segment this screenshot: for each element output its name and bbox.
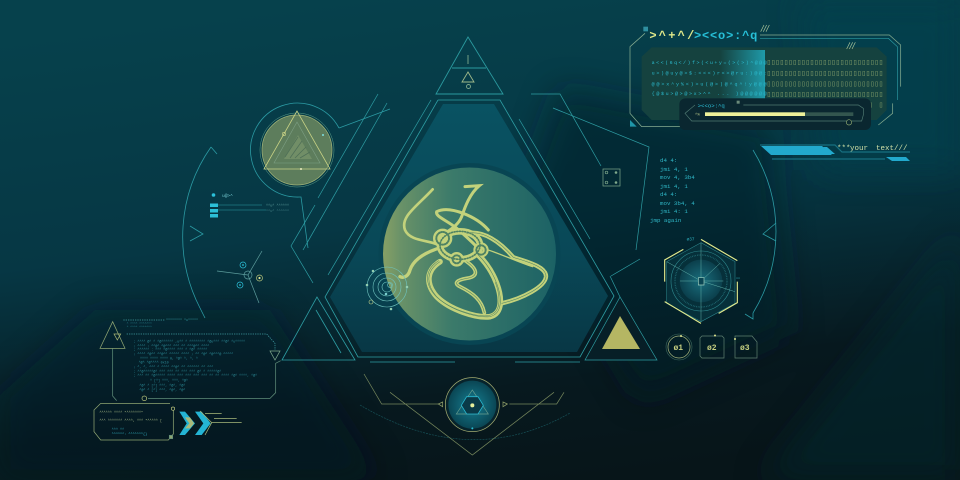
code panel: ^^^^^^^^ ^u^^^^^ [166,318,198,322]
code panel [94,318,281,440]
code panel: ; ^^^^ ^@^^ ^^@^^ ^^^^^ ^^^^ ; ^^ ^@^ ^@^^^@ ^^^^^ [133,352,233,356]
triangle medallion [251,103,390,248]
legend bars: ^^u^ ^^^^^^ [266,204,289,208]
badge 02: ø2 [707,344,717,353]
your text label: *** [837,145,851,153]
legend bars: u@>^ [222,193,233,199]
hexagon gauge [665,238,740,323]
right code text: jmi 4: 1 [660,208,688,215]
code panel: ^@^ ^ [^] ^^^, ^@^, ^@^ [139,383,185,387]
code panel: ^@^ ^@^^^^ 0x10 [139,361,169,365]
code panel: ; ^^^^ : ^^@^ ^@^^^ ^^^ ^^ ^^^@^^ ^^^^ [133,344,209,348]
your text label [760,145,910,161]
badge 02 [700,334,724,358]
code panel: ^ ^^^^ ^^^^^^^ [127,321,152,325]
code panel: ^^^ ^^ [112,428,124,433]
bottom emblem [364,374,564,455]
badge 01 [666,334,692,360]
data decoding panel: ▯▯▯▯▯▯▯▯▯▯▯▯▯▯▯▯▯▯▯▯▯▯▯▯▯▯▯ [767,81,883,89]
right triangle marker [585,259,657,360]
hexagon gauge: ø37 [687,238,695,243]
data decoding panel: ▯▯▯▯▯▯▯▯▯▯▯▯▯▯▯▯▯▯▯▯▯▯▯▯▯▯▯ [767,70,883,78]
your text label: text/// [876,145,908,153]
data decoding panel [630,25,901,130]
hexagon gauge: ^^ [736,277,740,281]
code panel: ; ^^@^^^^^@^ ^^^ ^^^ ^^ ^^^ ^^^ @^ ^ ^^^^^@^ [133,369,221,373]
radar dial on orb [366,267,408,310]
right code text [650,157,695,224]
code panel: ^^^ ^^^^^^^ ^^^^, ^^^ "^^^^^ [ [99,419,162,424]
code panel: ^^^^ ^^^^ ^^^^ 0, ^@^ ^, ^, ^ [140,356,198,360]
central triangle panel [325,100,614,362]
bottom arc [360,405,570,440]
code panel: ^ [^] ^^^, ^^^, ^@^ [150,379,188,383]
node cluster icon [217,251,262,303]
right code text: d4 4: [660,157,677,164]
right code text: mov 4, 3b4 [660,174,695,181]
orb [378,163,560,345]
code panel: ; ^, ^, ^^^ ^ ^^^^ ^^@^ ^^ ^^^^^^ ^^ ^^^ [133,365,213,369]
badge 03 [734,336,757,358]
code panel: ^@^ ^ [^] ^^^, ^@^, ^@^ [139,388,185,392]
right code text: d4 4: [660,191,677,198]
code panel: ^ ^^^^ ^^^^^^^ [127,325,152,329]
code panel: ; ^^^^^^ : ^^^ ^@^^^^ ^^^ ^ ^@^ ^^^^^ [133,348,207,352]
right lines and square icon [531,94,649,250]
badge 03: ø3 [740,344,750,353]
data decoding panel: ><<o>:^q [694,29,757,43]
code panel: ; ^^^ ^^ ^@^^^^^ ^^^^ ^^^ ^^^ ^^^ ^^^ ^^ ^^ ^^^^ ^@^ ^^^^, ^@^ [133,374,257,378]
progress panel: ><<o>:^q [698,103,725,110]
data decoding panel: u>)@uy@>$:<<<)r<>@ru:)@@: [652,71,767,77]
right code text: jmi 4, 1 [660,183,688,190]
left large arc [183,147,217,318]
creature [400,186,546,317]
data decoding panel: ▯▯▯▯▯▯▯▯▯▯▯▯▯▯▯▯▯▯▯▯▯▯▯▯▯▯▯ [767,60,883,68]
your text label: your [850,145,868,153]
data decoding panel: >^+^/ [649,29,694,43]
right code text: jmi 4, 1 [660,166,688,173]
code panel: ^^^^^^ ^^^^ "^^^^^^^" [99,410,143,415]
data decoding panel: a<<(6q</)f>(<u+y=(>(>)^@@@ [652,60,767,66]
left connector lines [291,94,387,283]
data decoding panel: {@$u>@>@>x>^^ ... )@@@@@@ [652,91,767,97]
legend bars [210,193,289,218]
chevron icon [179,411,242,435]
badge 01: ø1 [674,344,683,353]
code panel: ; ^^^^ @^ ^ ^@^^^^^^ ,u^^ ^ ^^^^^^^^ ^@u^^^ ^^@^ ^u^^^^^ [133,340,245,344]
left triangle outline [282,297,355,360]
data decoding panel: ▯▯▯▯▯▯▯▯▯▯▯▯▯▯▯▯▯▯▯▯▯▯▯▯▯▯▯ [767,91,883,99]
data decoding panel: @@>x^y%<)>u(@>)@^q^!y@@@ [652,81,767,87]
right large arc [745,150,776,319]
legend bars: ^^u^ ^^^^^^ [266,209,289,214]
right code text: jmp again [650,217,681,224]
data decoding panel: ▯▯ [868,102,883,110]
code panel: ^^^^^^: ^^^^^^^{} [112,432,147,437]
right code text: mov 3b4, 4 [660,200,695,207]
progress panel [679,98,871,130]
top triangle marker [436,37,503,94]
progress panel: ^% [695,113,700,118]
